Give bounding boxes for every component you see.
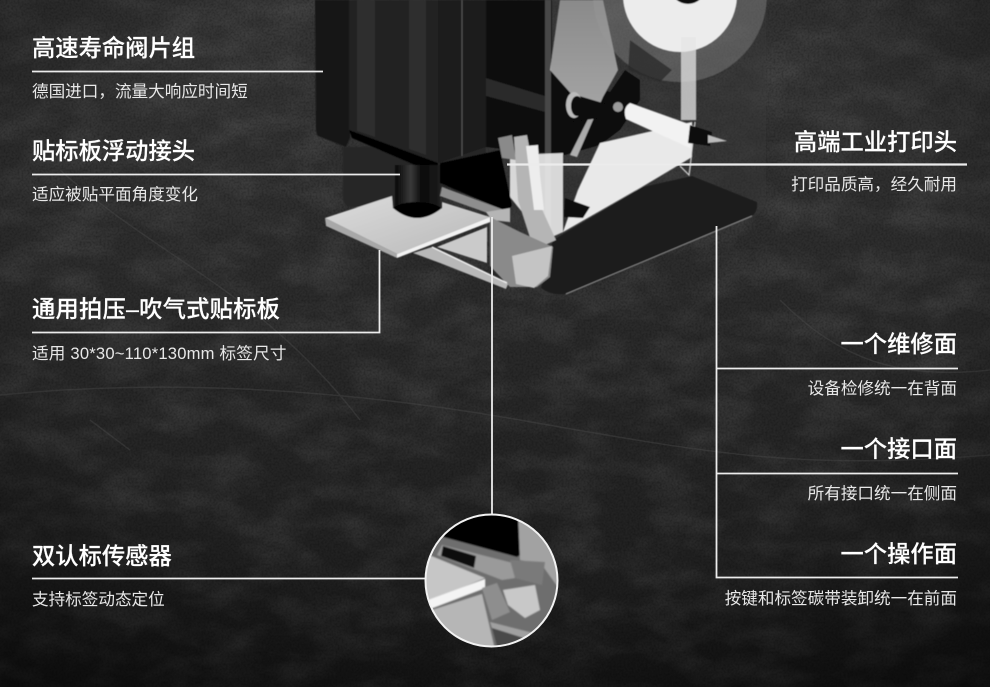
inner black chassis — [486, 0, 640, 155]
applicator rail assembly — [413, 150, 553, 289]
label: tamp-blow plate — [32, 296, 287, 363]
lower rear panel — [343, 147, 486, 207]
description: 所有接口统一在侧面 — [808, 484, 957, 503]
description: 适用 30*30~110*130mm 标签尺寸 — [32, 344, 287, 363]
label: one interface side — [808, 436, 957, 503]
description: 打印品质高，经久耐用 — [791, 175, 957, 194]
label: valve group — [32, 35, 248, 101]
heading: 一个维修面 — [841, 331, 957, 357]
guide shaft — [486, 78, 545, 112]
description: 支持标签动态定位 — [32, 590, 165, 609]
heading: 贴标板浮动接头 — [32, 138, 195, 164]
label roll — [593, 0, 767, 82]
translucent backing band — [550, 0, 618, 157]
suction cylinder — [391, 165, 443, 222]
heading: 高端工业打印头 — [794, 129, 957, 155]
description: 设备检修统一在背面 — [808, 379, 957, 398]
description: 适应被贴平面角度变化 — [32, 185, 198, 204]
heading: 一个操作面 — [841, 541, 957, 567]
main control box — [349, 0, 486, 175]
label: floating joint — [32, 138, 198, 204]
description: 按键和标签碳带装卸统一在前面 — [725, 589, 957, 608]
tamp-blow plate — [325, 196, 490, 258]
label: dual sensor — [32, 543, 172, 609]
label strip — [563, 122, 692, 232]
heading: 通用拍压–吹气式贴标板 — [32, 296, 280, 322]
detail magnifier: dual label sensor — [424, 514, 558, 648]
heading: 一个接口面 — [841, 436, 957, 462]
heading: 高速寿命阀片组 — [32, 35, 195, 61]
heading: 双认标传感器 — [32, 543, 172, 569]
label: one maintenance side — [808, 331, 957, 398]
peel roller — [625, 103, 727, 148]
print head bracket — [498, 135, 590, 250]
rear black case — [315, 0, 350, 147]
dark base cover — [541, 176, 757, 294]
transparent cover — [486, 0, 766, 295]
white bracket plate — [510, 153, 563, 240]
description: 德国进口，流量大响应时间短 — [32, 82, 248, 101]
label: one operation side — [725, 541, 957, 608]
label: print head — [791, 129, 957, 194]
